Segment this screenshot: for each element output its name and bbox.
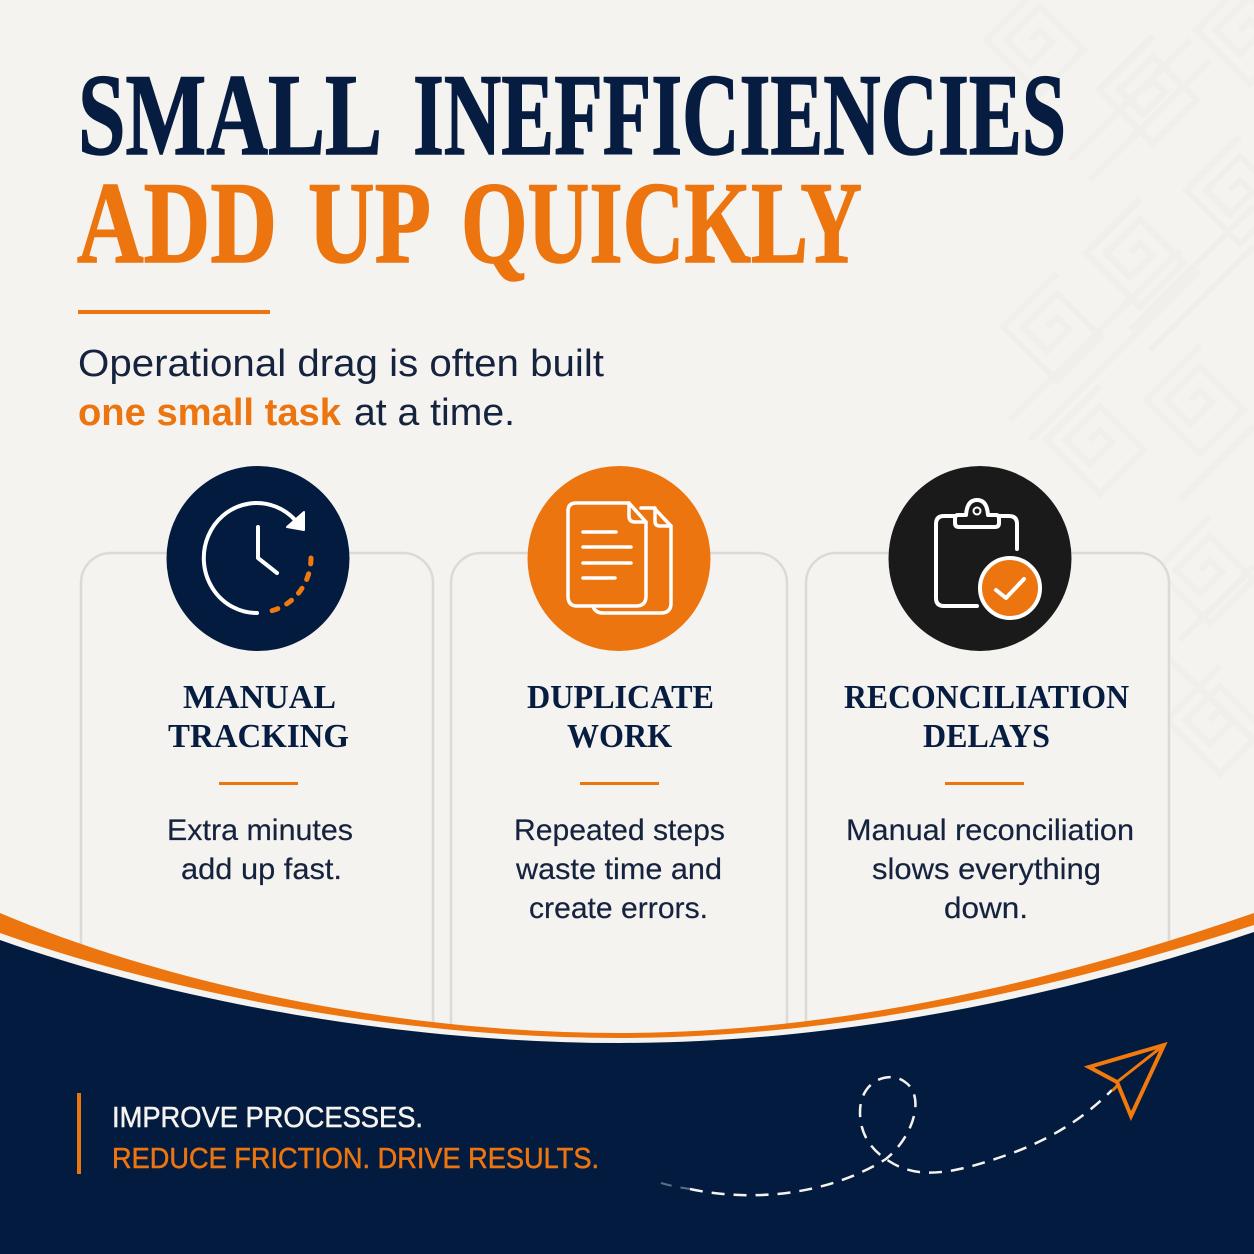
icon: paper plane — [1089, 1045, 1164, 1116]
card outline — [81, 553, 433, 1113]
title divider — [78, 310, 270, 314]
heading: DUPLICATE — [527, 679, 714, 716]
title line 2: ADD — [77, 159, 277, 288]
icon: documents — [528, 466, 710, 651]
panel: reconciliation delays — [806, 466, 1169, 1113]
title line 2: QUICKLY — [461, 159, 862, 288]
subtitle: one small task — [78, 392, 342, 434]
footer text — [112, 1102, 599, 1175]
dashed flight path — [690, 1077, 1112, 1195]
description — [514, 814, 725, 925]
description: create errors. — [529, 892, 708, 925]
panel: manual tracking — [81, 466, 433, 1113]
description: down. — [944, 892, 1028, 925]
heading: RECONCILIATION — [844, 679, 1129, 716]
description: add up fast. — [181, 853, 342, 886]
heading — [168, 679, 349, 755]
heading: DELAYS — [923, 718, 1050, 755]
background maze pattern — [986, 0, 1254, 774]
fading start of flight path — [661, 1183, 690, 1189]
description: slows everything — [872, 853, 1101, 886]
title line 1: SMALL — [78, 51, 382, 180]
title line 2: UP — [308, 159, 431, 288]
description: waste time and — [515, 853, 722, 886]
title line 1 — [78, 51, 1066, 180]
card outline — [451, 553, 787, 1113]
accent rule — [580, 782, 659, 785]
heading — [844, 679, 1129, 755]
accent rule — [219, 782, 298, 785]
heading: MANUAL — [183, 679, 336, 716]
title — [77, 51, 1066, 288]
title line 2 — [77, 159, 862, 288]
icon: clock — [166, 466, 350, 651]
footer wave — [0, 913, 1254, 1254]
icon: clipboard check — [888, 466, 1072, 651]
subtitle — [78, 343, 604, 434]
footer text: IMPROVE PROCESSES. — [112, 1102, 423, 1134]
description: Repeated steps — [514, 814, 725, 847]
description: Extra minutes — [167, 814, 353, 847]
card outline — [806, 553, 1169, 1113]
description — [167, 814, 353, 886]
panel: duplicate work — [451, 466, 787, 1113]
footer text: REDUCE FRICTION. DRIVE RESULTS. — [112, 1143, 599, 1175]
heading — [527, 679, 714, 755]
subtitle: at a time. — [354, 392, 515, 434]
heading: WORK — [567, 718, 673, 755]
accent rule — [945, 782, 1024, 785]
subtitle: Operational drag is often built — [78, 343, 604, 385]
description — [846, 814, 1134, 925]
heading: TRACKING — [168, 718, 349, 755]
footer accent bar — [77, 1093, 81, 1174]
description: Manual reconciliation — [846, 814, 1134, 847]
